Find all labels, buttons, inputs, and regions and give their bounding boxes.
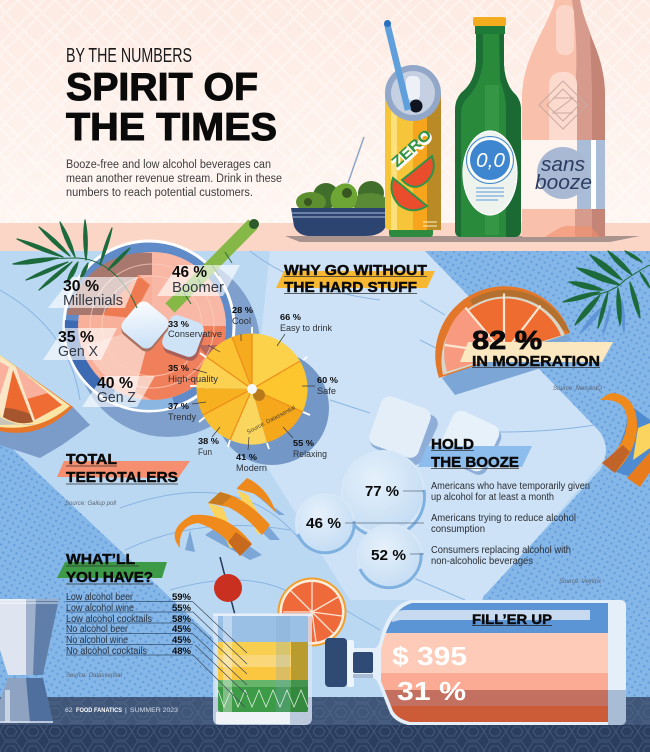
Conservative (168, 319, 222, 339)
heading (66, 66, 277, 149)
data rows (66, 592, 193, 657)
heading: HOLD (431, 436, 474, 453)
panel: what'll you have (57, 551, 193, 679)
heading: THE BOOZE (431, 454, 519, 471)
can label: ZERO (389, 128, 437, 173)
icon: olive bowl (291, 137, 390, 236)
data rows: Low alcohol beer (66, 592, 134, 603)
Cool: 28 % (232, 305, 253, 315)
icon: cocktail glass with cherry (193, 557, 312, 725)
drink layers (218, 642, 308, 655)
description: replacing alcohol (431, 545, 571, 567)
Millenials: Millenials (63, 292, 123, 309)
heading: total teetotalers: TOTAL (66, 451, 117, 468)
Conservative: 33 % (168, 319, 189, 329)
source: Source: Veylinx (559, 578, 602, 585)
description: temporarily given up: up alcohol for at least a month (431, 492, 554, 503)
heading: THE TIMES (66, 106, 277, 149)
heading: total teetotalers: TEETOTALERS (66, 469, 178, 486)
Easy to drink: Easy to drink (280, 323, 332, 333)
panel: generation stats (13, 220, 240, 407)
footer text: 62 (65, 707, 73, 714)
Gen Z: 40 % (97, 375, 133, 392)
cherry stick (220, 557, 242, 642)
data rows: 55% (172, 603, 191, 613)
footer text: SUMMER 2023 (130, 707, 178, 714)
bubble 46 percent (296, 494, 354, 553)
bottle cap (347, 640, 354, 687)
Easy to drink (280, 312, 332, 333)
data rows: 48% (172, 646, 191, 656)
High-quality: High-quality (168, 374, 219, 384)
background: navy footer band (0, 697, 650, 752)
ice cubes (161, 317, 207, 363)
heading: why go without the hard stuff: WHY GO WITHOUT (284, 263, 427, 279)
heading: SPIRIT OF (66, 66, 258, 109)
intro text: numbers to reach potential customers. (66, 187, 253, 199)
banner (460, 342, 613, 362)
Safe (317, 375, 338, 396)
icon: zero can: ZERO (388, 126, 436, 171)
icon: zero can (384, 20, 441, 237)
zigzag (218, 690, 308, 707)
Boomer: 46 % (172, 264, 207, 281)
citrus wheel sectors (196, 333, 308, 445)
Relaxing (293, 438, 327, 459)
data rows: 58% (172, 614, 191, 624)
description: replacing alcohol: Consumers replacing alcohol with (431, 545, 571, 556)
description: trying to reduce: consumption (431, 524, 485, 535)
Millenials: 30 % (63, 278, 99, 295)
icon: sans booze bottle (522, 0, 605, 237)
icon: palm frond right (563, 251, 650, 338)
heading: why go without the hard stuff: THE HARD STUFF (284, 280, 417, 296)
Cool: Cool (232, 316, 251, 326)
leader lines (192, 334, 315, 450)
Safe: Safe (317, 386, 336, 396)
source: Source: Datassential (66, 672, 123, 679)
Easy to drink: 66 % (280, 312, 301, 322)
background: table top (0, 223, 650, 252)
cherry (214, 574, 242, 602)
Millenials (63, 278, 123, 309)
straw (387, 23, 408, 110)
glass body (213, 613, 312, 725)
heading: why go without the hard stuff (276, 263, 435, 296)
description: temporarily given up: Americans who have temporarily given (431, 481, 590, 492)
Fun: 38 % (198, 436, 219, 446)
title block (66, 45, 282, 199)
Fun (198, 436, 219, 457)
diamond logo (539, 81, 587, 129)
Modern: 41 % (236, 452, 257, 462)
kicker: BY THE NUMBERS (66, 45, 192, 67)
straw (170, 224, 253, 308)
data rows: No alcohol cocktails (66, 646, 147, 657)
data rows: No alcohol wine (66, 635, 128, 646)
grapefruit half (435, 286, 570, 378)
palm frond left (13, 220, 137, 308)
Cool (232, 305, 253, 326)
glass shadow (76, 253, 260, 437)
heading: total teetotalers (57, 451, 190, 507)
icon: orange peel twist (175, 478, 285, 560)
Conservative: Conservative (168, 329, 222, 339)
heading: YOU HAVE? (66, 569, 153, 586)
watermelon (402, 156, 434, 187)
leader lines (193, 602, 247, 707)
bubble 52 percent: 52 % (371, 547, 406, 564)
Boomer: Boomer (172, 279, 224, 296)
icon: citrus wheel on glass (278, 578, 346, 646)
icon: green bottle (455, 17, 521, 237)
data rows: Low alcohol cocktails (66, 614, 152, 625)
stat: 31 percent: 31 % (397, 676, 466, 706)
bottle label (463, 131, 517, 215)
heading: FILL’ER UP (472, 611, 552, 627)
intro text (66, 159, 282, 199)
shadow under drinks (285, 236, 640, 242)
data rows: 45% (172, 635, 191, 645)
panel: why go without the hard stuff citrus chart (168, 305, 338, 473)
Modern (236, 452, 267, 473)
Gen X: Gen X (58, 343, 98, 360)
heading: WHAT’LL (66, 551, 135, 568)
description: trying to reduce: Americans trying to reduce alcohol (431, 513, 576, 524)
heading (418, 436, 532, 471)
footer text: | (125, 707, 127, 714)
source: Source: NielsenIQ (553, 385, 602, 392)
intro text: Booze-free and low alcohol beverages can (66, 159, 271, 171)
stat: 82 percent in moderation with grapefruit (435, 286, 613, 395)
icon: left grapefruit wedge (0, 355, 90, 458)
data rows: Low alcohol wine (66, 603, 134, 614)
icon: green bottle: 0,0 (476, 150, 505, 172)
stat: $395: $ 395 (392, 641, 467, 671)
Fun: Fun (198, 447, 212, 457)
icon: round cocktail glass from above (64, 219, 260, 437)
bubble 52 percent (358, 525, 422, 589)
Safe: 60 % (317, 375, 338, 385)
bottle glass (353, 600, 626, 725)
Relaxing: 55 % (293, 438, 314, 448)
bubble 77 percent: 77 % (365, 483, 399, 500)
source: Source: Gallup poll (65, 500, 117, 507)
High-quality: 35 % (168, 363, 189, 373)
High-quality (168, 363, 219, 384)
liquid layers (375, 600, 610, 724)
grapefruit shadow (442, 335, 570, 395)
Source: Datassential: Source: Datassential (246, 405, 297, 436)
Trendy: Trendy (168, 412, 196, 422)
icon: ice cubes (367, 394, 504, 478)
82 percent: 82 % (472, 325, 542, 355)
liquid (78, 252, 226, 400)
icon: sans booze bottle: booze (535, 172, 592, 194)
Trendy (168, 401, 196, 422)
footer text: FOOD FANATICS (76, 707, 122, 714)
data rows: No alcohol beer (66, 624, 129, 635)
panel: hold the booze (296, 436, 602, 589)
icon: right orange peel (600, 393, 650, 487)
label bands (43, 265, 240, 407)
bubble 77 percent (342, 451, 425, 537)
citrus shadow (215, 351, 329, 465)
Gen X: 35 % (58, 329, 94, 346)
data rows: 45% (172, 624, 191, 634)
Modern: Modern (236, 463, 267, 473)
icon: sans booze bottle: sans (541, 154, 585, 176)
citrus ticks (190, 327, 310, 449)
bubble 46 percent: 46 % (306, 515, 341, 532)
Gen Z: Gen Z (97, 389, 136, 406)
description: replacing alcohol: non-alcoholic beverages (431, 556, 533, 567)
Trendy: 37 % (168, 401, 189, 411)
heading (57, 551, 167, 586)
intro text: mean another revenue stream. Drink in these (66, 173, 282, 185)
glass rim (64, 241, 234, 411)
description: temporarily given up (431, 481, 590, 503)
description: trying to reduce (431, 513, 576, 535)
Gen Z (97, 375, 136, 406)
Boomer (172, 264, 224, 296)
icon: jigger (0, 599, 59, 723)
data rows: 59% (172, 592, 191, 602)
background: blue panel (0, 251, 650, 700)
panel: fill'er up bottle (325, 600, 626, 725)
footer text (65, 707, 178, 714)
label band (522, 140, 605, 209)
Relaxing: Relaxing (293, 449, 327, 459)
background: top pink wall (0, 0, 650, 226)
Gen X (58, 329, 98, 360)
in moderation: IN MODERATION (472, 354, 600, 370)
